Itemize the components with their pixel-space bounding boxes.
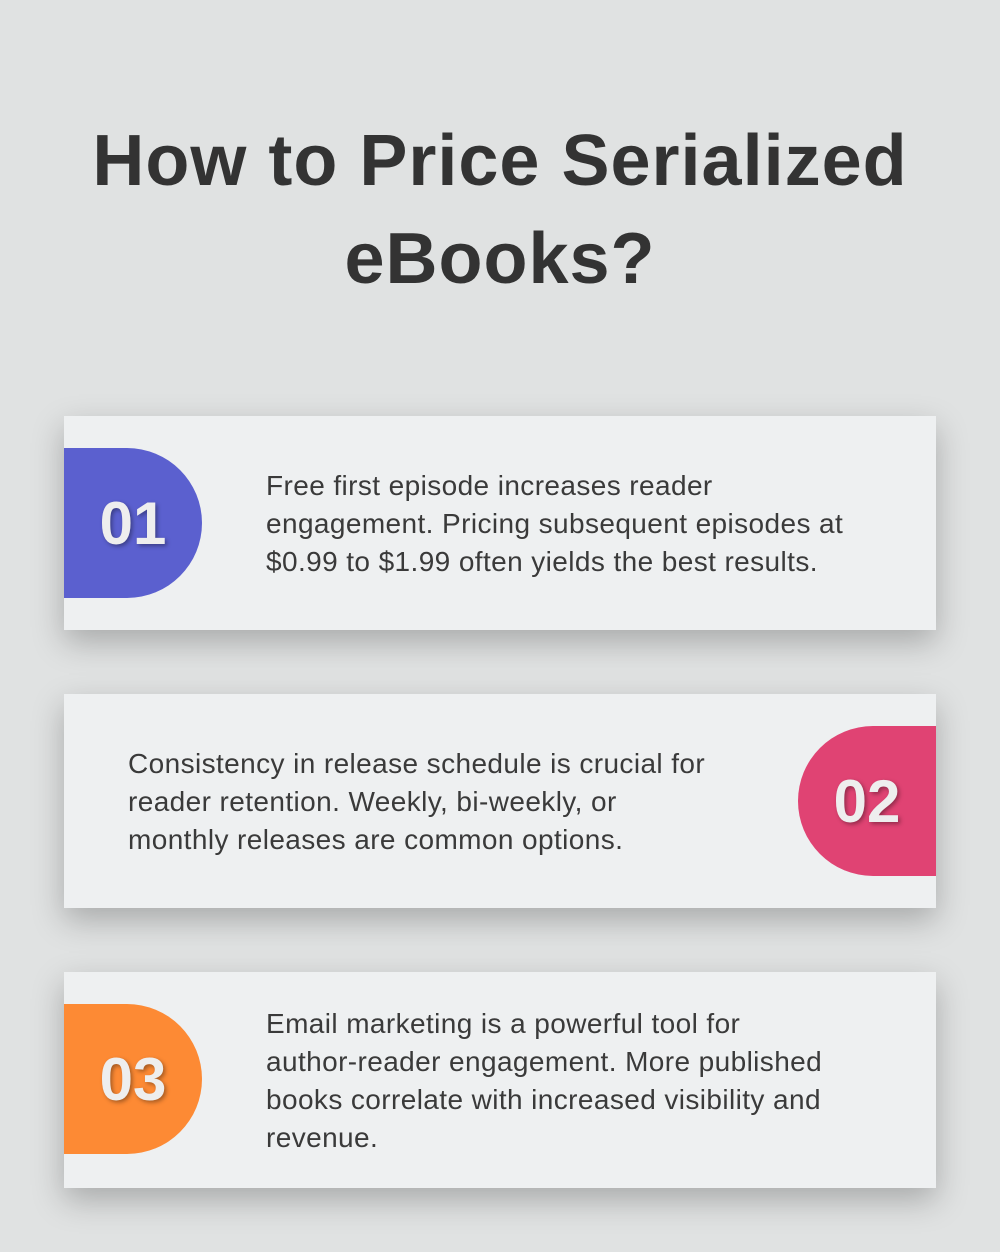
text 03: author-reader engagement. More published	[266, 1046, 822, 1077]
text 01	[266, 470, 843, 577]
badge 03	[64, 1004, 202, 1154]
text 03: Email marketing is a powerful tool for	[266, 1008, 740, 1039]
text 01: $0.99 to $1.99 often yields the best results.	[266, 546, 818, 577]
text 02: Consistency in release schedule is crucial for	[128, 748, 705, 779]
text 03	[266, 1008, 822, 1153]
text 02	[128, 748, 705, 855]
badge 01: 01	[100, 490, 166, 556]
panel: step 03	[64, 972, 936, 1188]
badge 02: 02	[834, 768, 900, 834]
text 03: books correlate with increased visibility and	[266, 1084, 821, 1115]
text 03: revenue.	[266, 1122, 378, 1153]
title: eBooks?	[344, 219, 656, 299]
text 01: engagement. Pricing subsequent episodes at	[266, 508, 843, 539]
title: How to Price Serialized	[92, 121, 908, 201]
text 02: monthly releases are common options.	[128, 824, 623, 855]
badge 03: 03	[100, 1046, 166, 1112]
text 01: Free first episode increases reader	[266, 470, 713, 501]
panel: step 01	[64, 416, 936, 630]
badge 02	[798, 726, 936, 876]
text 02: reader retention. Weekly, bi-weekly, or	[128, 786, 617, 817]
panel: step 02	[64, 694, 936, 908]
title	[92, 121, 908, 299]
badge 01	[64, 448, 202, 598]
